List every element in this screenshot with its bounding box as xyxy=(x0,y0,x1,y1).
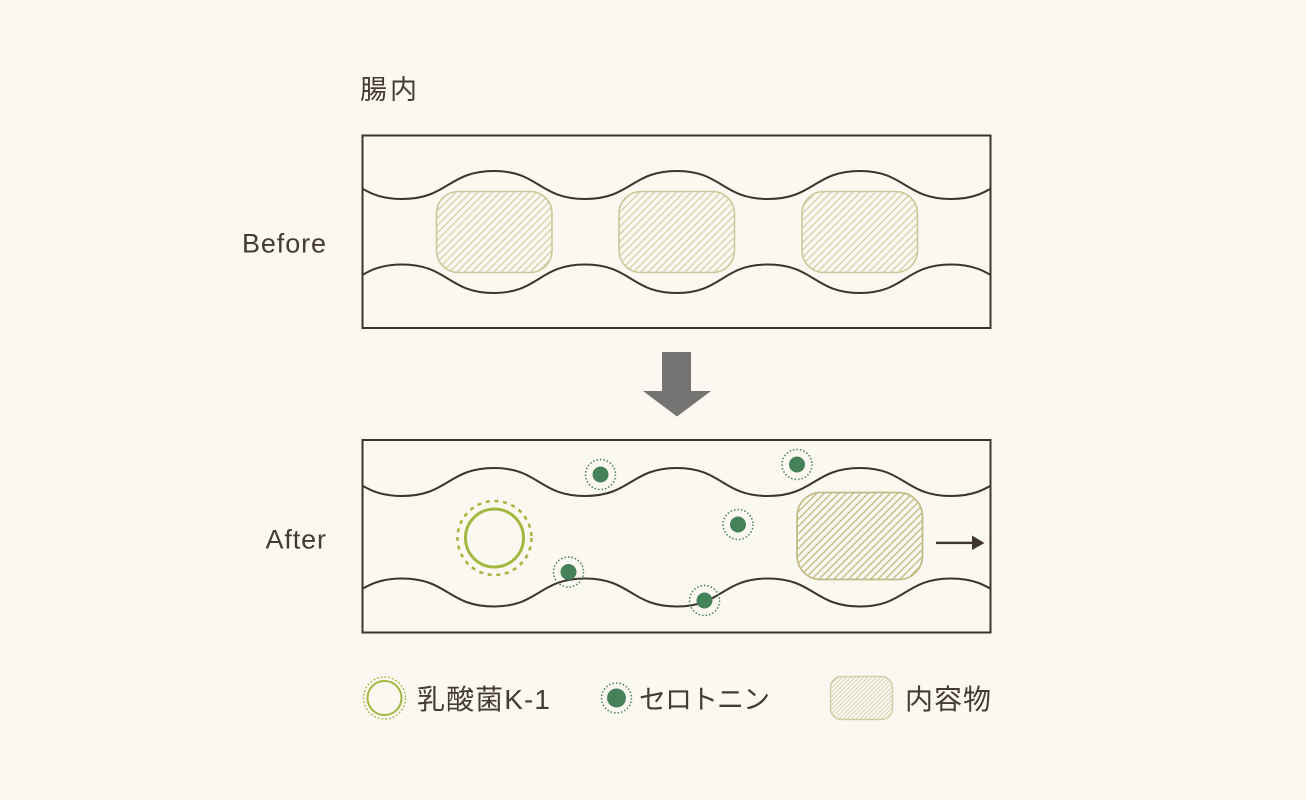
intestine walls: after xyxy=(364,467,990,608)
icon: serotonin 1 xyxy=(586,460,616,490)
contents blob: after xyxy=(797,492,922,580)
icon: serotonin 3 xyxy=(723,510,753,540)
label: Before: Before xyxy=(242,228,326,258)
icon: serotonin 5 xyxy=(690,586,720,616)
frame: after xyxy=(362,440,990,632)
heading: 腸内: 腸内 xyxy=(360,75,417,105)
panel: before xyxy=(362,134,992,329)
frame: before xyxy=(362,136,990,328)
legend item: lactic acid bacteria K-1 xyxy=(364,677,550,719)
legend item: contents: 内容物 xyxy=(905,684,991,715)
legend item: serotonin: セロトニン xyxy=(639,685,770,715)
icon: serotonin 2 xyxy=(782,450,812,480)
label: After: After xyxy=(266,524,326,554)
arrow: before to after xyxy=(643,352,711,416)
intestine walls: before xyxy=(364,170,990,294)
legend item: contents xyxy=(830,676,991,720)
icon: serotonin 4 xyxy=(554,557,584,587)
icon: lactic acid bacteria K-1 xyxy=(458,501,532,575)
legend xyxy=(364,676,991,720)
arrow: movement of contents xyxy=(936,536,984,550)
contents blobs: before xyxy=(436,192,918,272)
panel: after xyxy=(362,439,992,634)
legend item: lactic acid bacteria K-1: 乳酸菌K-1 xyxy=(417,684,550,715)
